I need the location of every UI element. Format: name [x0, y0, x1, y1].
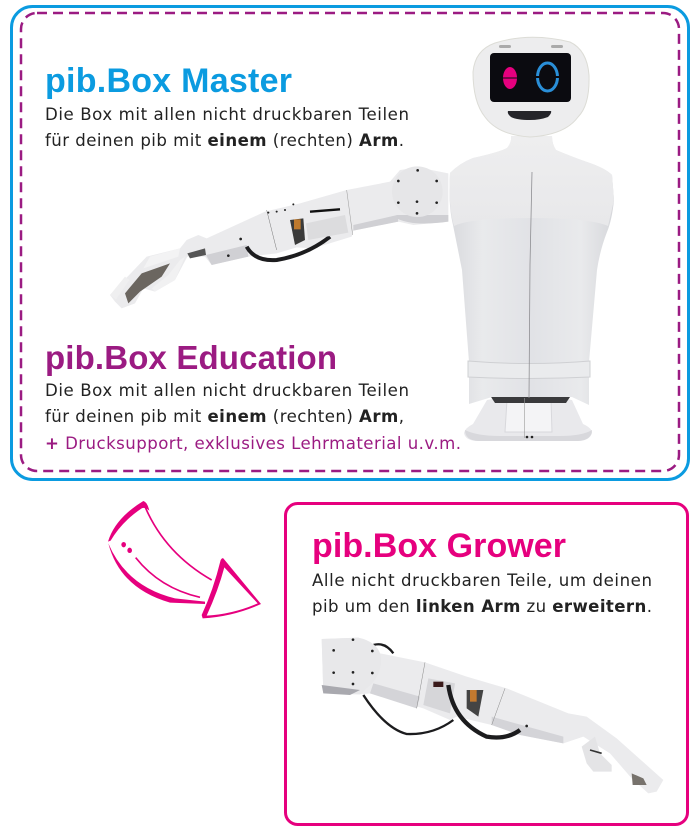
robot head — [473, 37, 589, 137]
text block: Education description: + Drucksupport, exklusives Lehrmaterial u.v.m. — [45, 434, 461, 453]
robot base — [464, 397, 592, 441]
shoulder joint — [392, 166, 448, 224]
robot left arm — [322, 638, 663, 793]
left eye — [502, 67, 518, 89]
main cable — [448, 685, 520, 737]
arm shading — [206, 215, 398, 265]
text block: Grower description: pib um den linken Arm zu erweitern. — [312, 597, 652, 616]
cable — [247, 237, 330, 260]
text block: Master description: für deinen pib mit einem (rechten) Arm. — [45, 131, 404, 150]
hand — [110, 248, 185, 303]
robot: pib torso and head — [449, 37, 614, 441]
arm silhouette — [110, 167, 448, 308]
text block: Grower description — [312, 571, 652, 616]
right eye — [535, 63, 560, 91]
text block: Master description — [45, 105, 409, 150]
heading: pib.Box Master: pib.Box Master — [45, 62, 292, 100]
panel: pib.Box Master and Education — [12, 6, 688, 480]
heading: pib.Box Grower: pib.Box Grower — [312, 527, 566, 565]
robot torso — [449, 136, 614, 405]
arm silhouette — [322, 638, 663, 793]
mouth — [508, 111, 551, 120]
text block: Education description: Die Box mit allen nicht druckbaren Teilen — [45, 381, 409, 400]
text block: Master description: Die Box mit allen nicht druckbaren Teilen — [45, 105, 409, 124]
text block: Grower description: Alle nicht druckbaren Teile, um deinen — [312, 571, 652, 590]
shoulder joint — [322, 638, 381, 695]
wrist — [187, 248, 206, 258]
text block: Education description — [45, 381, 461, 453]
panel: pib.Box Grower — [286, 504, 688, 824]
robot right arm — [110, 166, 448, 308]
elbow opening — [423, 678, 483, 717]
face screen — [490, 53, 571, 102]
heading: pib.Box Education: pib.Box Education — [45, 339, 337, 376]
elbow opening — [290, 209, 348, 245]
hand — [582, 737, 647, 785]
arrow — [108, 501, 261, 618]
cables behind — [363, 644, 453, 734]
arm shading — [370, 683, 563, 743]
text block: Education description: für deinen pib mit einem (rechten) Arm, — [45, 407, 404, 426]
